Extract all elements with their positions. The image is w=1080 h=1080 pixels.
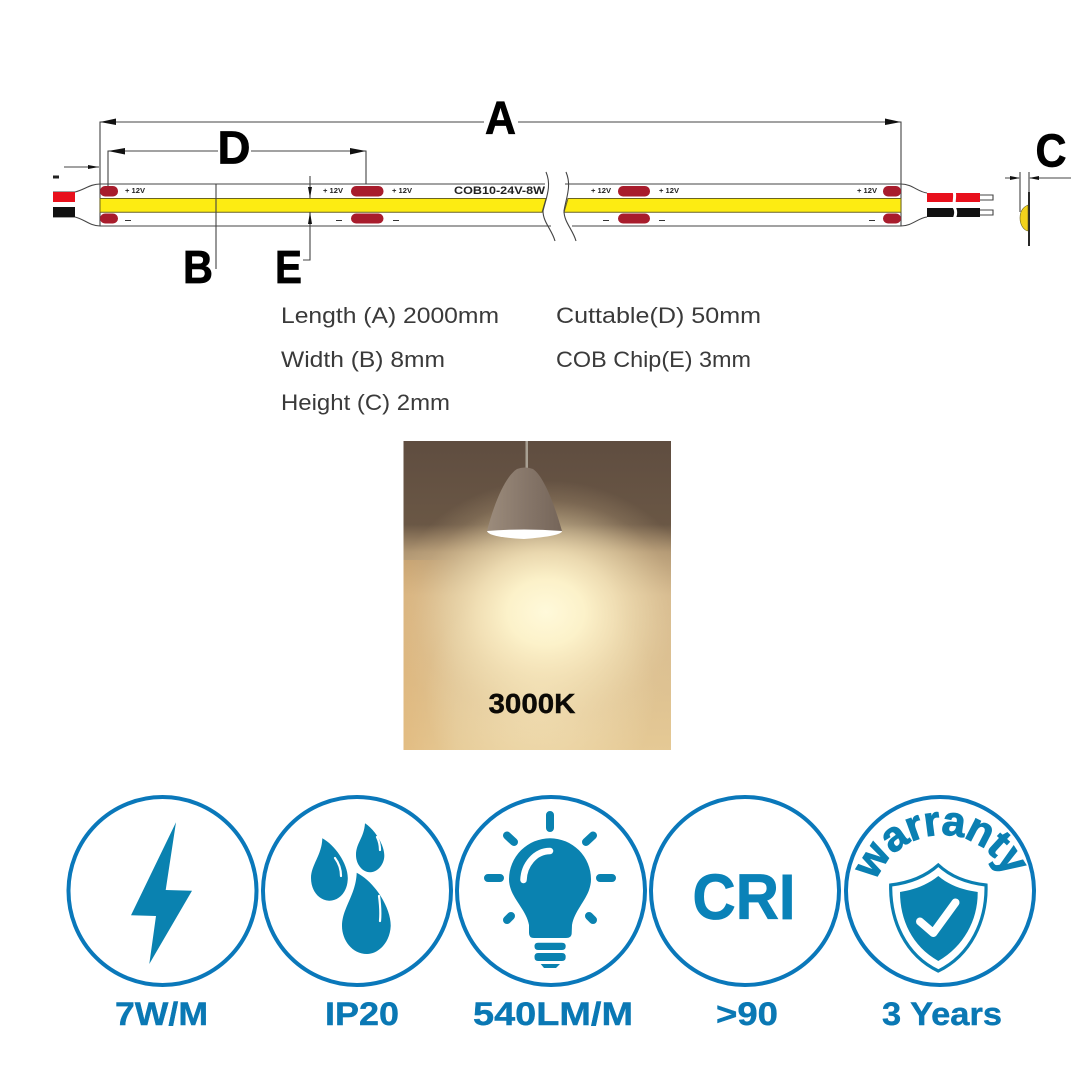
dimension C side profile: C: [1036, 124, 1066, 176]
feature: IP rating: [263, 797, 451, 1032]
dimension E: [275, 176, 312, 293]
icon: light bulb: [488, 815, 612, 968]
dimension offset arrow: [64, 165, 99, 169]
small strip markings: + 12V: [659, 188, 679, 195]
dimension A: A: [485, 92, 516, 144]
icon: lightning bolt: [131, 822, 192, 964]
ring: [263, 797, 451, 985]
small strip markings: + 12V: [857, 188, 877, 195]
feature: power: [68, 797, 256, 1032]
small strip markings: + 12V: [392, 188, 412, 195]
ring: [846, 797, 1034, 985]
dimension C side profile: [1005, 124, 1071, 246]
feature: warranty: [844, 795, 1036, 1032]
pendant lamp: [487, 441, 562, 539]
dimension B: B: [183, 241, 213, 293]
label: IP20: [325, 996, 399, 1032]
small strip markings: + 12V: [125, 188, 145, 195]
curved warranty text: warranty: [854, 812, 1027, 877]
spec: length: Length (A) 2000mm: [281, 303, 499, 328]
spec: COB chip: COB Chip(E) 3mm: [556, 347, 751, 372]
strip body outline: [53, 184, 927, 226]
ring: [651, 797, 839, 985]
dimension D: [108, 122, 366, 186]
3000K lamp photo: [404, 441, 671, 750]
spec: cuttable: Cuttable(D) 50mm: [556, 303, 761, 328]
right lead wires: [927, 189, 993, 221]
ring: [457, 797, 645, 985]
label: >90: [716, 996, 778, 1032]
photo wall background: [404, 441, 671, 750]
yellow COB chip band: [100, 198, 901, 212]
small strip markings: + 12V: [591, 188, 611, 195]
label: 540LM/M: [473, 996, 633, 1032]
small strip markings: + 12V: [323, 188, 343, 195]
dimension D: D: [218, 122, 250, 174]
feature: color rendering: [651, 797, 839, 1032]
LED strip dimension diagram: [53, 92, 1071, 293]
label: 7W/M: [115, 996, 208, 1032]
spec: width: Width (B) 8mm: [281, 347, 445, 372]
label: 3 Years: [882, 996, 1002, 1032]
small strip markings: [125, 185, 877, 220]
dimension E: E: [275, 241, 302, 293]
color temperature label: 3000K: [488, 688, 576, 719]
solder pads: [100, 186, 901, 224]
ring: [68, 797, 256, 985]
strip break mark: [543, 172, 576, 241]
feature: luminous flux: [457, 797, 645, 1032]
icon: shield: [891, 865, 986, 971]
icon: water drops: [311, 823, 391, 954]
dimension B: [183, 184, 216, 293]
small strip markings: COB10-24V-8W: [454, 185, 546, 197]
spec: height: Height (C) 2mm: [281, 390, 450, 415]
icon: CRI text: CRI: [692, 861, 796, 933]
specification list: [281, 303, 761, 415]
dimension A: [100, 92, 901, 184]
left lead wires: [53, 176, 75, 217]
